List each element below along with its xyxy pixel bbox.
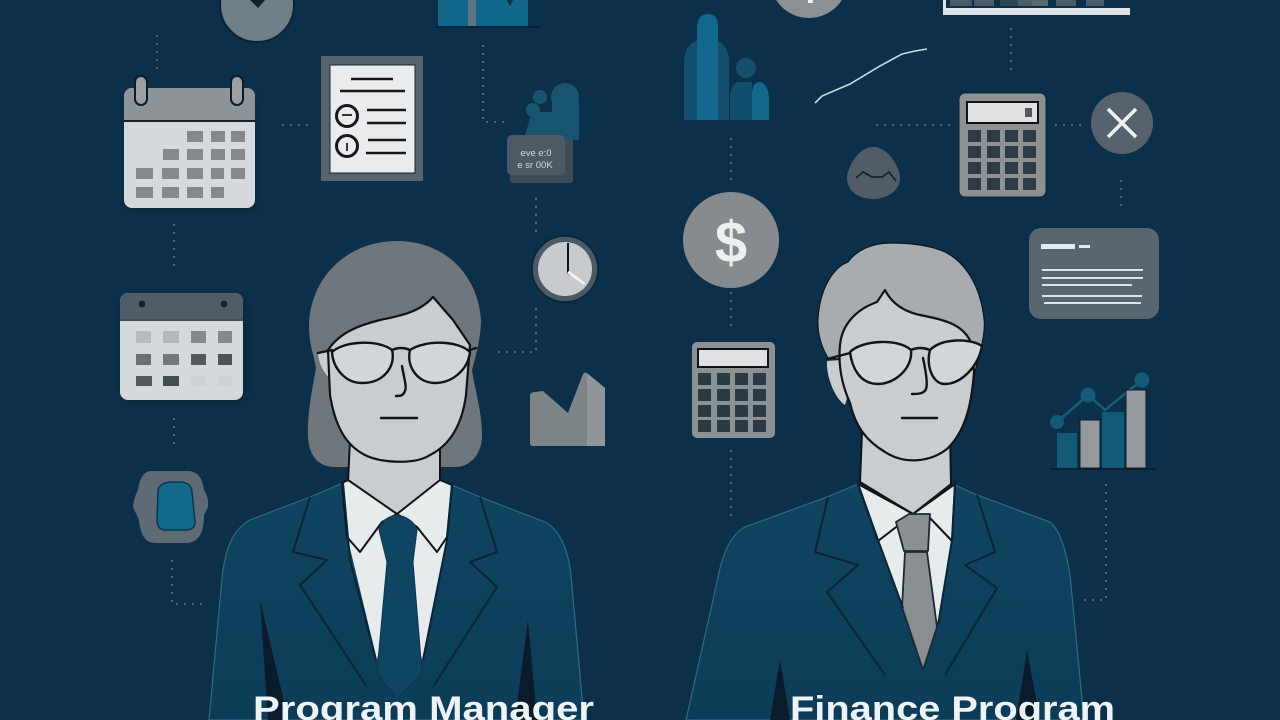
icon: calculator upper [959,93,1046,197]
icon: teal blobs with small label: eve e:0 [520,148,552,159]
icon: dollar coin [683,192,779,288]
woman lapels [293,483,497,687]
icon: teal bars [684,14,769,120]
man ear [827,360,848,405]
icon: dollar coin: $ [715,210,747,275]
man tie [896,514,937,670]
icon: teal blobs with small label: e sr 00K [517,160,553,171]
woman suit [209,483,584,720]
icon: wall clock [532,236,598,302]
icon: calculator lower [692,342,775,438]
woman hair [308,241,482,467]
man lapels [815,484,997,675]
icon: wall calendar [124,76,258,212]
figure: man finance program [686,243,1084,720]
icon: backpack badge [133,471,208,543]
panel: note card [1029,228,1159,319]
man suit shadows [770,650,1040,720]
man shirt and collar [858,484,955,640]
woman face [328,297,470,462]
bar chart: growth bars with trend dots [1050,372,1156,469]
icon: top teal document [436,0,540,27]
icon: teal blobs with small label [507,83,579,183]
icon: top right chart frame [943,0,1130,15]
icon: rounded stone with arch [847,147,900,199]
icon: top center coin [770,0,848,18]
man suit [686,484,1084,720]
icon: trend signature line [815,49,927,103]
man hair [818,243,984,372]
woman shirt and collar [342,480,452,660]
woman glasses [318,343,476,418]
icon: mountain chart [530,372,605,446]
icon: pocket calendar [120,293,245,404]
woman tie [377,515,422,700]
icon: close circle [1091,92,1153,154]
man face [839,290,974,460]
woman ear [318,349,332,380]
woman suit shadows [260,600,537,720]
man glasses [827,340,982,418]
icon: checklist document [321,56,423,181]
man neck [860,432,951,514]
woman neck [348,440,440,514]
icon: top clock dial [220,0,294,42]
figure: woman program manager [209,241,584,720]
